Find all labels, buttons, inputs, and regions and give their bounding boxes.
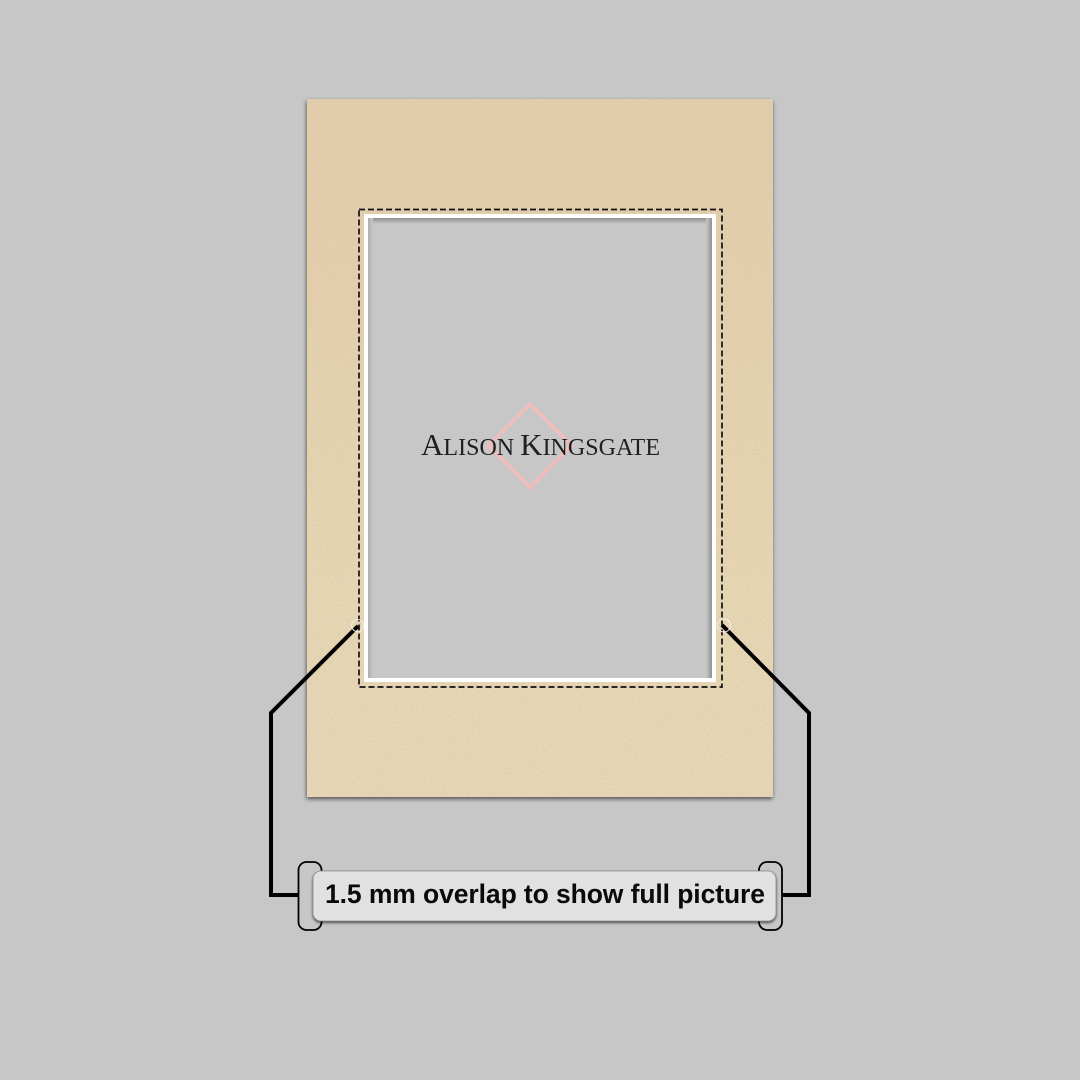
icon: pink diamond bbox=[487, 402, 573, 489]
callout text: 1.5 mm overlap to show full picture bbox=[325, 879, 765, 909]
dashed overlap outline bbox=[359, 210, 722, 687]
logo bbox=[421, 402, 660, 489]
callout label bbox=[313, 871, 776, 921]
left bracket bbox=[298, 862, 322, 930]
right bracket bbox=[759, 862, 782, 930]
callout leader line: right bbox=[718, 619, 809, 895]
panel: mat board bbox=[307, 99, 773, 797]
logo wordmark: ALISON KINGSGATE bbox=[421, 427, 660, 462]
callout leader line: left bbox=[271, 620, 364, 895]
picture window with white border bbox=[366, 216, 714, 680]
